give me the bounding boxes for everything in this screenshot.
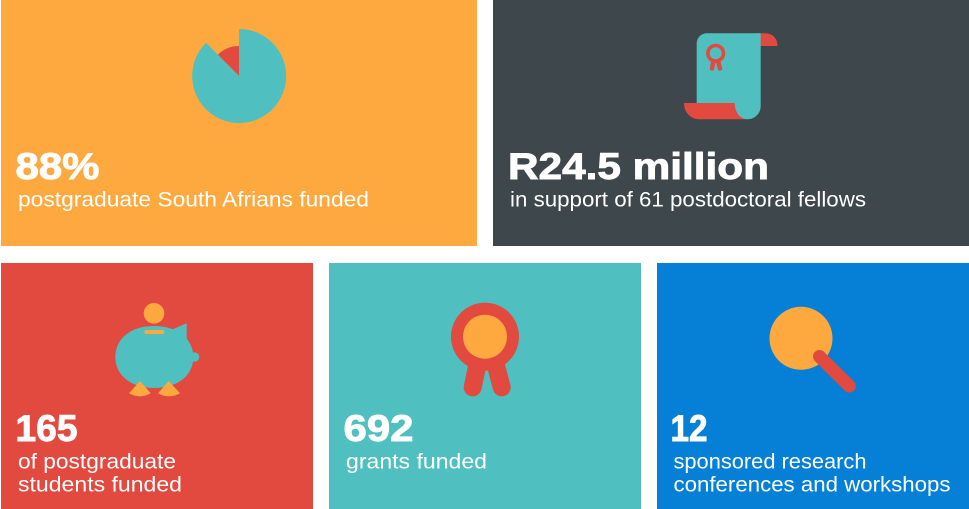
label: postgraduate South Afrians funded: postgraduate South Afrians funded	[18, 188, 369, 212]
label: of postgraduate students funded: of postgraduate	[18, 450, 176, 474]
stat: 88%: 88%	[16, 145, 100, 187]
panel: 692 grants funded	[329, 263, 641, 509]
label: grants funded: grants funded	[346, 450, 487, 474]
panel: 12 sponsored research conferences and workshops	[657, 263, 969, 509]
icon: certificate scroll	[684, 33, 778, 119]
icon: magnifying glass	[770, 307, 849, 386]
panel: 165 postgraduate students funded	[1, 263, 313, 509]
panel: R24.5 million postdoctoral fellows	[493, 0, 969, 246]
icon: award rosette	[451, 303, 519, 387]
stat: 692: 692	[344, 407, 414, 449]
panel: 88% postgraduate South Africans funded	[1, 0, 477, 246]
icon: piggy bank	[115, 303, 199, 396]
stat: R24.5 million: R24.5 million	[508, 145, 769, 187]
label: of postgraduate students funded: students funded	[18, 474, 182, 496]
label: sponsored research conferences and workshops: conferences and workshops	[674, 474, 950, 496]
stat: 165: 165	[16, 407, 78, 449]
label: sponsored research conferences and workshops: sponsored research	[674, 450, 866, 474]
stat: 12: 12	[670, 407, 708, 449]
label: in support of 61 postdoctoral fellows: in support of 61 postdoctoral fellows	[510, 188, 866, 212]
icon: pie chart	[192, 29, 286, 123]
